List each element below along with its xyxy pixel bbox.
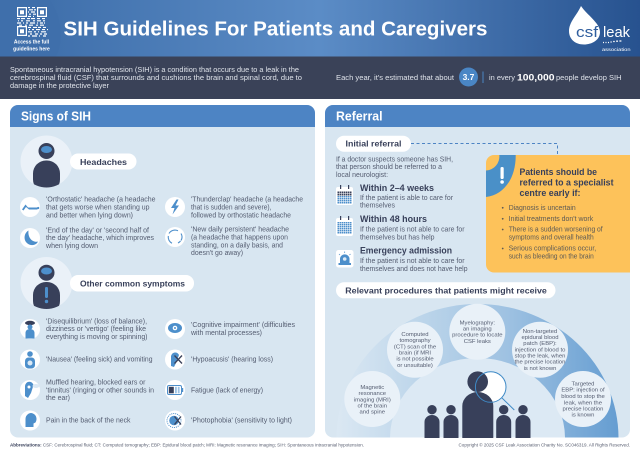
- icon: thunderclap: [165, 197, 185, 217]
- panel: signs of SIH: [10, 105, 315, 438]
- logo: association: [602, 47, 631, 52]
- text: disequilibrium: [46, 318, 148, 341]
- text: cognitive impairment: [190, 322, 296, 337]
- text: disequilibrium: everything is moving or spinning): [46, 334, 148, 341]
- footer: abbreviations: Abbreviations: CSF: Cerebrospinal fluid; CT: Computed tomography; EBP: Epidural blood patch; MRI: Magnetic resonance imaging; SIH: Spontaneous intracranial hypotension.: [10, 442, 364, 448]
- icon: orthostatic: [20, 197, 40, 217]
- initial referral pill: Initial referral: [346, 139, 402, 149]
- text: initial referral: [336, 156, 453, 179]
- text: disequilibrium: dizziness or 'vertigo' (feeling like: [46, 326, 146, 333]
- panel: referral: [325, 105, 630, 438]
- header banner: [0, 0, 640, 56]
- footer: copyright: Copyright © 2025 CSF Leak Association Charity No. SC046319. All Rights Reserved.: [458, 442, 630, 448]
- procedures heading pill: [336, 282, 556, 298]
- text: muffled hearing: Muffled hearing, blocked ears or: [46, 380, 146, 387]
- QR code: guidelines here: [13, 46, 50, 52]
- procedure: non-targeted EBP: Non-targeted: [523, 329, 557, 335]
- statistic: [336, 68, 622, 86]
- procedure: CT: is not possible: [396, 357, 434, 363]
- text: thunderclap: followed by orthostatic headache: [191, 212, 291, 219]
- icon: nausea: [20, 350, 40, 370]
- text: photophobia: 'Photophobia' (sensitivity to light): [191, 418, 292, 424]
- QR code: Access the full: [14, 40, 50, 46]
- QR code: [13, 7, 50, 52]
- procedure: MRI: Magnetic: [360, 385, 384, 391]
- dashed connector arrow: [411, 144, 558, 155]
- text: cognitive impairment: 'Cognitive impairment' (difficulties: [191, 322, 296, 329]
- icon: cognitive impairment: [165, 319, 185, 339]
- referral: emergency admission: If the patient is not able to care for: [360, 258, 465, 265]
- text: orthostatic: that gets worse when standing up: [46, 204, 150, 212]
- text: end of day: 'End of the day' or 'second half of: [46, 227, 149, 234]
- referral: emergency admission: Emergency admission: [360, 246, 452, 256]
- logo: csf: [576, 24, 599, 41]
- icon: calendar 2: [336, 216, 353, 236]
- procedure: non-targeted EBP: epidural blood: [521, 335, 559, 341]
- headaches figure: [20, 136, 136, 192]
- icon: muffled hearing: [20, 380, 40, 400]
- procedure: non-targeted EBP: the precise location: [515, 360, 565, 366]
- callout bullets: Serious complications occur,: [509, 246, 596, 252]
- text: initial referral: local neurologist:: [336, 172, 388, 179]
- callout heading: referred to a specialist: [520, 178, 614, 188]
- text: muffled hearing: [46, 380, 154, 402]
- referral: within 2-4 weeks: themselves: [360, 202, 396, 210]
- referral: within 48 hours: Within 48 hours: [360, 214, 427, 224]
- text: fatigue: Fatigue (lack of energy): [191, 387, 263, 394]
- procedure: targeted EBP: is known: [572, 413, 594, 419]
- text: muffled hearing: the ear): [46, 395, 70, 402]
- procedure: targeted EBP: Targeted: [572, 382, 594, 388]
- headaches figure: Headaches: [80, 157, 127, 167]
- procedure: myelography: procedure to locate: [452, 333, 503, 339]
- heading: referral: Referral: [336, 110, 382, 124]
- icon: end of day moon: [20, 228, 40, 248]
- text: new daily persistent: 'New daily persistent' headache: [191, 227, 289, 234]
- procedure: MRI: of the brain: [358, 403, 387, 409]
- icon: warning quarter ring: [486, 155, 516, 197]
- procedure: myelography: [449, 304, 505, 360]
- callout bullets: There is a sudden worsening of: [509, 226, 603, 234]
- procedure: targeted EBP: [555, 371, 611, 427]
- procedure: CT: (CT) scan of the: [394, 344, 437, 350]
- icon: neck pain: [20, 410, 40, 430]
- icon: photophobia: [165, 410, 185, 430]
- procedure: non-targeted EBP: patch (EBP):: [523, 341, 557, 347]
- statistic: 3.7: [463, 72, 475, 82]
- procedure: CT: or unsuitable): [397, 363, 433, 369]
- text: orthostatic: [46, 196, 156, 219]
- text: disequilibrium: 'Disequilibrium' (loss of balance),: [46, 318, 147, 325]
- procedure: MRI: resonance: [359, 391, 387, 397]
- other symptoms figure: Other common symptoms: [80, 279, 185, 289]
- text: thunderclap: that is sudden and severe),: [191, 204, 272, 212]
- callout heading: [520, 167, 614, 198]
- intro text: [10, 67, 302, 90]
- procedure: targeted EBP: precise location: [563, 406, 603, 412]
- text: end of day: [45, 227, 155, 250]
- procedure: targeted EBP: EBP: injection of: [561, 388, 605, 394]
- statistic: 100,000: [517, 72, 554, 84]
- referral: emergency admission: themselves and does not have help: [360, 266, 468, 273]
- procedure: targeted EBP: leak, when the: [564, 400, 603, 406]
- procedure: non-targeted EBP: injection of blood to: [515, 347, 566, 353]
- procedure: non-targeted EBP: stop the leak, when: [515, 353, 565, 359]
- text: new daily persistent: standing, on a daily basis, and: [191, 242, 283, 249]
- intro text: cerebrospinal fluid (CSF) that surrounds and cushions the brain and spinal cord, due to: [10, 75, 302, 82]
- text: end of day: when lying down: [45, 243, 98, 250]
- people and magnifying glass: [424, 371, 530, 438]
- text: end of day: the day' headache, which improves: [46, 235, 155, 242]
- intro text: Spontaneous intracranial hypotension (SIH) is a condition that occurs due to a leak in the: [10, 67, 299, 74]
- procedure: MRI: and spine: [360, 409, 386, 415]
- procedures arch: [367, 304, 618, 438]
- text: neck pain: Pain in the back of the neck: [46, 418, 131, 424]
- text: orthostatic: 'Orthostatic' headache (a headache: [46, 196, 156, 204]
- logo: leak: [603, 24, 630, 41]
- initial referral pill: [336, 136, 411, 152]
- callout bullets: symptoms and overall health: [509, 234, 594, 242]
- text: new daily persistent: (a headache that happens upon: [191, 234, 288, 241]
- text: thunderclap: 'Thunderclap' headache (a headache: [191, 196, 303, 204]
- statistic: in every: [489, 75, 516, 82]
- text: muffled hearing: 'tinnitus' (ringing or other sounds in: [46, 387, 154, 394]
- procedure: non-targeted EBP: [512, 322, 568, 378]
- intro band: [0, 56, 640, 99]
- heading: signs of SIH: Signs of SIH: [21, 110, 91, 124]
- procedure: non-targeted EBP: is not known: [524, 366, 556, 372]
- text: hypoacusis: 'Hypoacusis' (hearing loss): [191, 357, 273, 364]
- text: new daily persistent: [191, 227, 289, 257]
- procedure: MRI: [344, 371, 400, 427]
- callout bullets: Initial treatments don't work: [509, 216, 594, 223]
- text: thunderclap: [191, 196, 303, 219]
- referral: within 2-4 weeks: [360, 183, 454, 210]
- referral: emergency admission: [360, 246, 468, 273]
- icon: new daily persistent: [165, 227, 185, 247]
- procedure: CT: brain (if MRI: [399, 351, 431, 357]
- text: new daily persistent: doesn't go away): [191, 250, 243, 257]
- procedure: myelography: an imaging: [463, 327, 492, 333]
- icon: calendar 1: [336, 185, 353, 205]
- procedure: targeted EBP: blood to stop the: [561, 394, 606, 400]
- intro text: damage in the protective layer: [10, 83, 110, 90]
- statistic: people develop SIH: [556, 75, 622, 82]
- icon: fatigue battery: [165, 380, 185, 400]
- text: orthostatic: and better when lying down): [46, 212, 133, 219]
- referral: within 48 hours: [360, 214, 465, 242]
- referral: within 48 hours: If the patient is not able to care for: [360, 226, 465, 234]
- referral: within 48 hours: themselves but has help: [360, 234, 435, 242]
- procedure: myelography: CSF leaks: [464, 339, 491, 345]
- procedures heading pill: Relevant procedures that patients might receive: [345, 285, 547, 295]
- callout bullets: [502, 205, 603, 260]
- procedure: CT: [387, 322, 443, 378]
- procedure: CT: tomography: [399, 338, 431, 344]
- procedure: myelography: Myelography:: [460, 321, 495, 327]
- logo: [569, 6, 631, 52]
- callout heading: centre early if:: [520, 188, 580, 198]
- procedure: MRI: imaging (MRI): [354, 397, 391, 403]
- text: cognitive impairment: with mental processes): [190, 330, 262, 337]
- callout heading: Patients should be: [520, 167, 597, 177]
- icon: hypoacusis: [165, 350, 185, 370]
- icon: emergency beacon: [336, 250, 354, 268]
- icon: disequilibrium: [20, 319, 40, 339]
- referral: within 2-4 weeks: If the patient is able to care for: [360, 195, 454, 202]
- procedure: CT: Computed: [401, 332, 429, 338]
- text: initial referral: If a doctor suspects someone has SIH,: [336, 156, 453, 164]
- callout bullets: such as bleeding on the brain: [509, 253, 594, 260]
- title: SIH Guidelines For Patients and Caregivers: [64, 18, 488, 40]
- other symptoms figure: [20, 257, 194, 314]
- text: initial referral: that person should be referred to a: [336, 164, 442, 171]
- statistic: Each year, it's estimated that about: [336, 75, 454, 82]
- referral: within 2-4 weeks: Within 2–4 weeks: [360, 183, 434, 193]
- callout bullets: Diagnosis is uncertain: [509, 205, 576, 212]
- text: nausea: 'Nausea' (feeling sick) and vomiting: [46, 357, 153, 364]
- callout: specialist centre: [486, 155, 630, 272]
